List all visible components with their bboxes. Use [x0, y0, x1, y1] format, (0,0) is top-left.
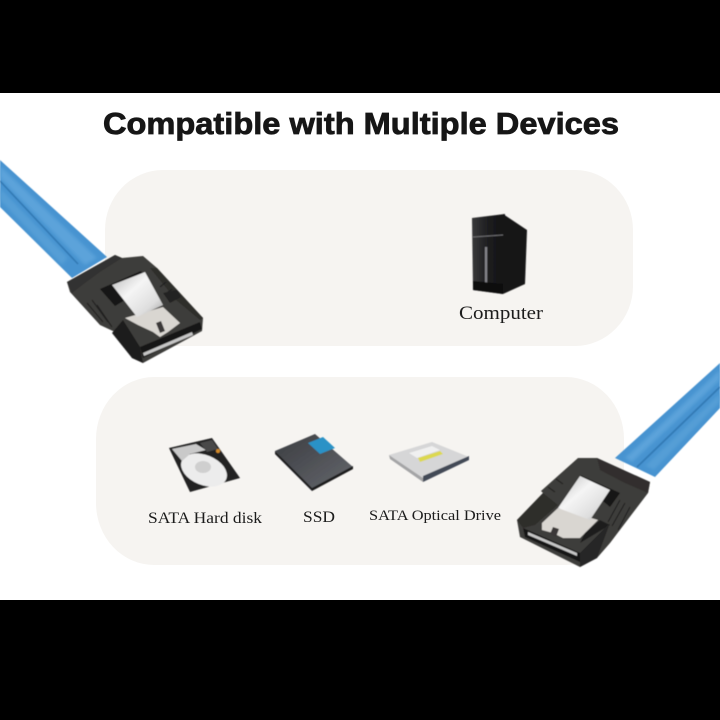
bottom black band	[0, 600, 720, 720]
panel: internal drives	[96, 377, 624, 565]
icon: optical drive	[389, 442, 469, 482]
title: Compatible with Multiple Devices	[103, 106, 619, 141]
blue cable wires	[0, 160, 107, 278]
connector	[517, 458, 650, 567]
connector	[67, 255, 203, 363]
icon: hard disk	[169, 438, 240, 493]
label: SSD: SSD	[303, 509, 335, 526]
panel: computer	[105, 170, 633, 346]
label: SATA Optical Drive: SATA Optical Drive	[369, 508, 501, 524]
label: Computer: Computer	[459, 304, 543, 324]
label: SATA Hard disk: SATA Hard disk	[148, 510, 262, 527]
blue cable wires	[615, 363, 720, 477]
icon: SSD	[275, 434, 353, 491]
right SATA cable	[517, 363, 720, 567]
left SATA cable	[0, 160, 203, 363]
top black band	[0, 0, 720, 93]
white background band	[0, 93, 720, 600]
icon: computer tower	[472, 214, 527, 294]
